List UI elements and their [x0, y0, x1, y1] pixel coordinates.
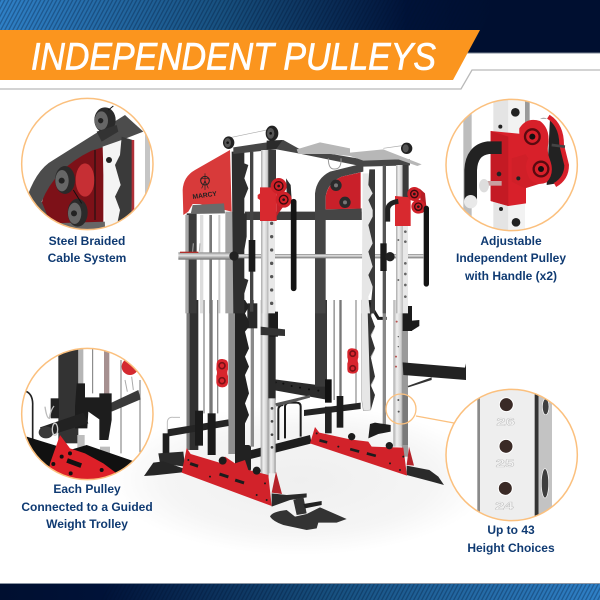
right red adjustable pulley [395, 187, 427, 226]
smith bar [233, 254, 423, 258]
centre front upright [261, 300, 269, 477]
logo [192, 173, 218, 201]
front red base plate [235, 445, 251, 472]
rear base [245, 435, 312, 460]
height number 25: 25 [496, 458, 514, 470]
smith bar sleeve [178, 252, 233, 260]
silver toothed column [362, 173, 373, 313]
bottom banner [0, 583, 600, 600]
machine: lower half of the functional trainer [144, 300, 466, 530]
left strap handle [285, 202, 302, 288]
right foot [407, 466, 444, 485]
label: up to 43 height choices: Height Choices [467, 541, 555, 555]
left toothed column [232, 152, 248, 313]
right weight carriage [304, 403, 361, 416]
left red adjustable pulley [258, 178, 292, 221]
title: INDEPENDENT PULLEYS [31, 36, 436, 78]
height number 26: 26 [496, 416, 515, 428]
machine: upper half of the functional trainer [178, 126, 427, 313]
silver top plates [297, 142, 422, 166]
rear crossbar [262, 378, 325, 399]
pulley top left [223, 136, 234, 149]
height number 24: 24 [495, 500, 514, 512]
right pulley handle [388, 201, 398, 222]
logo: MARCY [192, 191, 218, 201]
front foot plate [272, 493, 307, 507]
floor shadow [110, 405, 490, 555]
red logo panel [183, 150, 232, 215]
red arch interior [326, 172, 361, 209]
label: adjustable independent pulley: Adjustable [480, 234, 542, 248]
label: adjustable independent pulley: Independent Pulley [456, 251, 566, 265]
label: steel braided cable system: Cable System [48, 251, 126, 265]
label: each pulley connected: Each Pulley [53, 482, 121, 496]
left post [187, 300, 198, 450]
label: each pulley connected: Weight Trolley [46, 517, 128, 531]
callout circle: adjustable pulley with handle [445, 98, 578, 232]
red weight right [347, 348, 358, 374]
toothed silver column right [362, 300, 374, 411]
right front upright [393, 300, 403, 447]
right red base plate [310, 427, 407, 476]
red weight left [216, 359, 228, 387]
top beam [233, 140, 410, 167]
rear crossbar [245, 212, 362, 220]
callout circle: guided weight trolley [20, 347, 153, 483]
label: up to 43 height choices: Up to 43 [487, 523, 535, 537]
callout circle: height choices [446, 389, 577, 521]
callout circle: steel braided cable system [20, 97, 153, 232]
cable column [250, 152, 253, 312]
label: adjustable independent pulley: with Handle (x2) [464, 269, 557, 283]
centre upright [261, 150, 269, 313]
title ribbon [0, 30, 600, 89]
left bar clamp [249, 240, 255, 272]
spring clamp on left rod [247, 303, 257, 328]
right bar clamp [380, 243, 387, 271]
left foot [144, 461, 183, 476]
left weight carriage [167, 419, 229, 437]
right strap handle [418, 208, 434, 284]
right centre rod [383, 165, 386, 313]
toothed column [228, 300, 236, 454]
pulley top right [401, 143, 412, 154]
cables and guide rods [204, 300, 218, 413]
top banner background [0, 0, 600, 54]
pulley top middle [266, 126, 283, 149]
right arch [315, 163, 363, 313]
hook on rear column [368, 302, 387, 318]
rear right column [315, 300, 327, 387]
callout connector for height holes [386, 394, 454, 424]
right upright [396, 165, 403, 313]
label: steel braided cable system: Steel Braided [49, 234, 125, 248]
label: each pulley connected: Connected to a Guided [21, 500, 153, 514]
cables across the top [232, 129, 407, 148]
left post [187, 213, 197, 313]
